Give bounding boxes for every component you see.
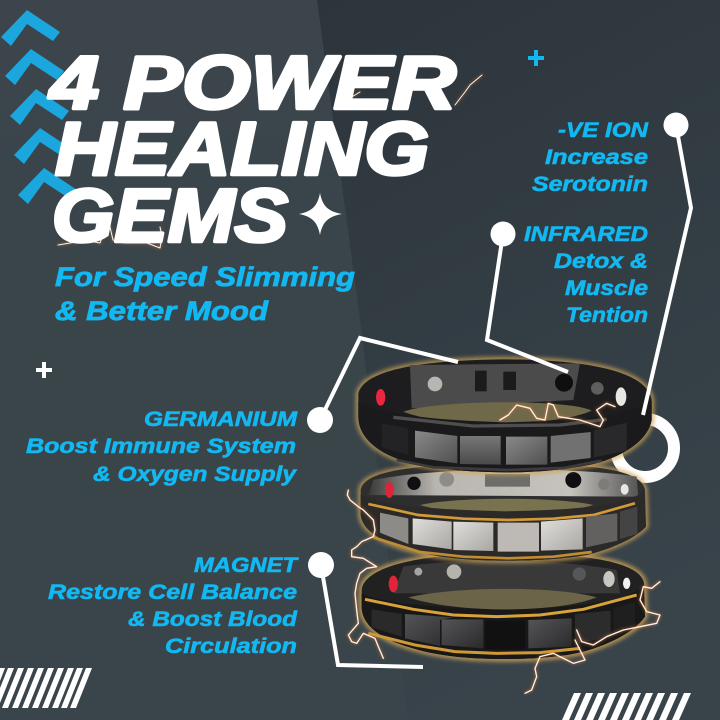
label: MAGNET: & Boost Blood bbox=[128, 607, 298, 631]
subtitle: & Better Mood bbox=[55, 296, 269, 326]
icon: sparkle star bbox=[299, 193, 342, 235]
subtitle bbox=[55, 262, 356, 326]
label: -VE ION: Increase bbox=[545, 145, 648, 169]
label: MAGNET: Restore Cell Balance bbox=[48, 580, 297, 604]
label: -VE ION: -VE ION bbox=[558, 118, 649, 142]
label: MAGNET bbox=[48, 553, 299, 658]
bracelet: bottom black and gold bbox=[362, 553, 645, 659]
label: INFRARED bbox=[524, 222, 648, 327]
bracelet: top black and steel bbox=[358, 359, 652, 472]
lightning bolts bbox=[347, 403, 660, 693]
icon: white plus bbox=[36, 362, 52, 378]
label: INFRARED: Tention bbox=[566, 303, 648, 327]
stripes: bottom right bbox=[562, 693, 691, 720]
subtitle: For Speed Slimming bbox=[55, 262, 356, 292]
label: GERMANIUM: Boost Immune System bbox=[26, 434, 296, 458]
label: GERMANIUM: GERMANIUM bbox=[144, 407, 298, 431]
label: MAGNET: MAGNET bbox=[194, 553, 299, 577]
lightning near title bbox=[58, 75, 482, 248]
title: GEMS bbox=[52, 174, 288, 258]
label: INFRARED: INFRARED bbox=[524, 222, 648, 246]
title: 4 POWER bbox=[48, 40, 456, 124]
label: INFRARED: Detox & bbox=[554, 249, 648, 273]
label: GERMANIUM bbox=[26, 407, 298, 486]
title: HEALING bbox=[55, 106, 429, 190]
stripes: bottom left bbox=[0, 668, 92, 708]
bracelets bbox=[347, 359, 660, 693]
label: -VE ION: Serotonin bbox=[532, 172, 648, 196]
label: INFRARED: Muscle bbox=[565, 276, 648, 300]
icon: blue chevrons bbox=[1, 10, 77, 204]
title bbox=[48, 40, 456, 258]
label: -VE ION bbox=[532, 118, 649, 196]
label: MAGNET: Circulation bbox=[165, 634, 297, 658]
callout line: INFRARED bbox=[487, 222, 568, 372]
icon: white ring bbox=[616, 419, 674, 477]
label: GERMANIUM: & Oxygen Supply bbox=[93, 462, 297, 486]
callout line: -VE ION bbox=[643, 112, 691, 415]
callout line: MAGNET bbox=[308, 552, 423, 667]
bracelet: middle silver and gold bbox=[361, 463, 646, 561]
icon: blue plus bbox=[528, 50, 544, 66]
callout line: GERMANIUM bbox=[307, 338, 458, 433]
